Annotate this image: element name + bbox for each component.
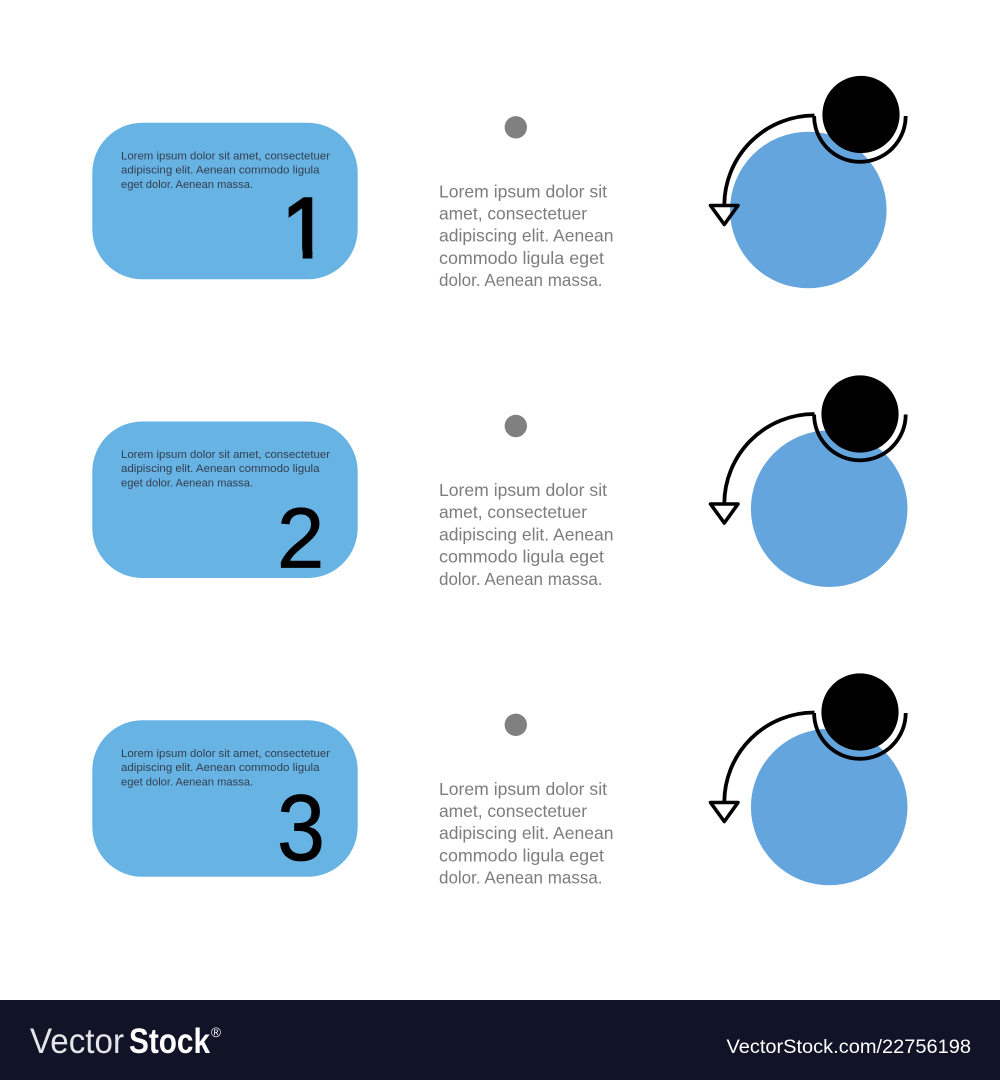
footer logo: ®	[211, 1025, 221, 1040]
text block: step 3 description: commodo ligula eget	[439, 846, 604, 866]
text block: step 3 description	[439, 779, 614, 888]
card text 2: adipiscing elit. Aenean commodo ligula	[121, 463, 320, 475]
footer bar	[0, 1000, 1000, 1080]
panel: step 1 card	[92, 123, 358, 279]
panel: step 1 bullet	[505, 116, 527, 138]
panel: step 3 card	[92, 720, 358, 880]
text block: step 1 description: dolor. Aenean massa.	[439, 270, 602, 290]
text block: step 3 description: amet, consectetuer	[439, 801, 587, 821]
card text 3: eget dolor. Aenean massa.	[121, 776, 253, 788]
card background 3	[92, 720, 358, 877]
text block: step 2 description: dolor. Aenean massa.	[439, 569, 602, 589]
text block: step 1 description: adipiscing elit. Aenean	[439, 226, 614, 246]
icon: step 1 circles and arrow	[710, 76, 906, 288]
text block: step 1 description: Lorem ipsum dolor sit	[439, 181, 607, 201]
text block: step 2 description: amet, consectetuer	[439, 502, 587, 522]
card text 1: Lorem ipsum dolor sit amet, consectetuer	[121, 150, 330, 162]
card text 2	[121, 449, 330, 490]
text block: step 2 description: adipiscing elit. Aenean	[439, 524, 614, 544]
panel: step 3 bullet	[505, 714, 527, 736]
card text 2: eget dolor. Aenean massa.	[121, 478, 253, 490]
text block: step 3 description: Lorem ipsum dolor sit	[439, 779, 607, 799]
icon: step 3 circles and arrow	[710, 673, 908, 885]
text block: step 2 description: commodo ligula eget	[439, 547, 604, 567]
footer logo: Vector	[30, 1022, 124, 1061]
card background 1	[92, 123, 358, 279]
footer logo	[30, 1022, 221, 1061]
large blue circle 2	[751, 430, 908, 587]
black circle 3	[821, 673, 899, 751]
panel: step 2 bullet	[505, 415, 527, 437]
card text 3: Lorem ipsum dolor sit amet, consectetuer	[121, 748, 330, 760]
large blue circle 3	[751, 729, 908, 885]
card text 1: eget dolor. Aenean massa.	[121, 179, 253, 191]
card text 2: Lorem ipsum dolor sit amet, consectetuer	[121, 449, 330, 461]
text block: step 2 description	[439, 480, 614, 589]
card text 3: adipiscing elit. Aenean commodo ligula	[121, 762, 320, 774]
card text 1: adipiscing elit. Aenean commodo ligula	[121, 164, 320, 176]
large blue circle 1	[730, 132, 887, 288]
text block: step 1 description: amet, consectetuer	[439, 203, 587, 223]
black circle 2	[821, 375, 899, 453]
text block: step 2 description: Lorem ipsum dolor sit	[439, 480, 607, 500]
footer image id: VectorStock.com/22756198	[726, 1036, 971, 1058]
text block: step 3 description: adipiscing elit. Aenean	[439, 823, 614, 843]
icon: step 2 circles and arrow	[710, 375, 908, 587]
arrow 1	[710, 115, 906, 224]
text block: step 3 description: dolor. Aenean massa.	[439, 868, 602, 888]
number 2: 2	[277, 492, 324, 586]
black circle 1	[822, 76, 900, 153]
card background 2	[92, 422, 358, 578]
panel: step 2 card	[92, 422, 358, 586]
number 1: 1	[282, 180, 330, 278]
arrow 3	[710, 712, 906, 822]
text block: step 1 description: commodo ligula eget	[439, 248, 604, 268]
arrow 2	[710, 414, 906, 523]
number 3: 3	[277, 775, 325, 880]
card text 1	[121, 150, 330, 191]
card text 3	[121, 748, 330, 788]
footer logo: Stock	[129, 1022, 210, 1061]
text block: step 1 description	[439, 181, 614, 290]
